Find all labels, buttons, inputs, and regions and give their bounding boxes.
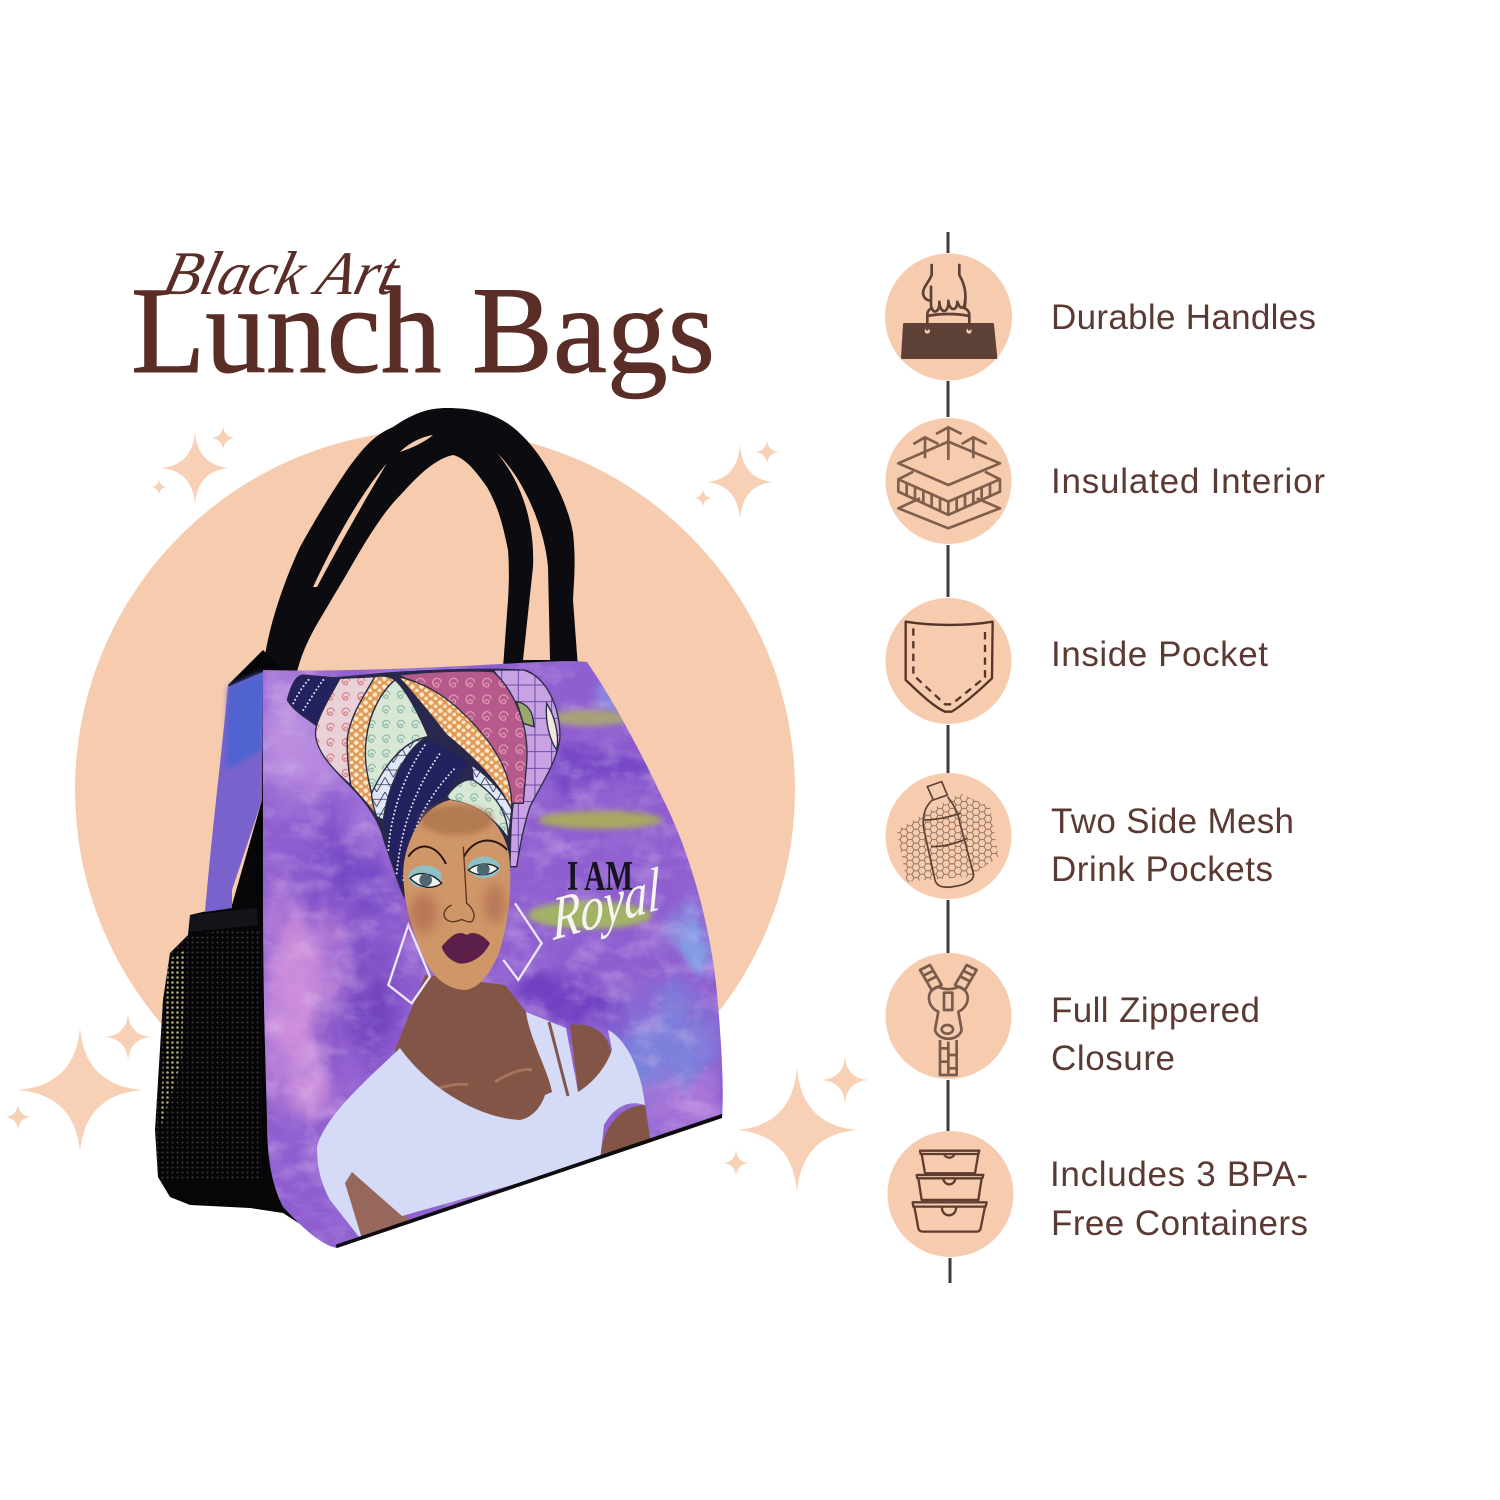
badge <box>885 254 1012 380</box>
label: Insulated Interior <box>1051 462 1325 501</box>
collarbone highlights <box>438 1068 532 1089</box>
chest and arms <box>345 975 655 1250</box>
badge <box>886 773 1012 899</box>
badge <box>888 1131 1014 1257</box>
label: Inside Pocket <box>1051 635 1268 674</box>
icon: insulated layers <box>898 427 1000 528</box>
fabric texture <box>255 655 735 1255</box>
feature 3: inside pocket <box>886 598 1268 724</box>
label: Durable Handles <box>1051 298 1316 337</box>
feature 4: mesh drink pockets <box>886 773 1294 899</box>
icon: zipper <box>920 965 977 1075</box>
icon: bottle in mesh <box>897 782 998 887</box>
sparkles <box>5 426 868 1192</box>
head wrap <box>287 669 560 897</box>
feature 1: durable handles <box>885 254 1316 380</box>
bag handles <box>263 408 578 672</box>
label: Includes 3 BPA- <box>1050 1155 1308 1194</box>
bag side panel <box>155 650 300 1224</box>
lips <box>442 933 490 964</box>
label <box>1050 1155 1308 1243</box>
white top <box>317 1012 645 1242</box>
bag front panel <box>245 655 735 1255</box>
label <box>1051 802 1294 889</box>
right cheek <box>485 883 505 923</box>
badge <box>886 953 1012 1079</box>
bag slogan <box>550 854 661 954</box>
title <box>131 239 715 399</box>
forehead shade <box>420 805 493 835</box>
feature 6: containers <box>888 1131 1308 1257</box>
label: Free Containers <box>1051 1204 1308 1243</box>
title: Lunch Bags: Lunch Bags <box>131 262 715 399</box>
watercolor wash <box>245 660 720 1130</box>
badge <box>886 418 1012 544</box>
label: Two Side Mesh <box>1051 802 1294 841</box>
icon: hand holding bag <box>902 265 996 358</box>
olive stripes <box>528 710 662 929</box>
label: Full Zippered <box>1051 991 1260 1030</box>
badge <box>886 598 1012 724</box>
icon: stacked containers <box>913 1151 987 1232</box>
face <box>403 800 510 990</box>
icon: pocket <box>906 622 993 712</box>
scarf dots <box>293 678 457 880</box>
label: Drink Pockets <box>1051 850 1273 889</box>
label <box>1051 991 1260 1078</box>
feature timeline <box>885 232 1325 1283</box>
lunch bag illustration <box>150 408 735 1255</box>
slogan: I AM: I AM <box>567 854 633 900</box>
title: Black Art script: Black Art <box>157 239 407 308</box>
slogan: Royal: Royal <box>550 855 661 954</box>
portrait: head, scarf and face <box>287 669 560 1003</box>
bottom rim <box>337 1118 724 1249</box>
vertical connector line <box>948 232 950 1283</box>
feature 2: insulated interior <box>886 418 1325 544</box>
cheeks <box>410 893 437 933</box>
label: Closure <box>1051 1039 1175 1078</box>
peach background circle <box>75 430 795 1150</box>
brows <box>408 841 507 864</box>
earrings <box>388 903 542 1003</box>
eyes <box>408 857 500 888</box>
mesh side pocket <box>150 930 265 1180</box>
nose <box>444 847 474 922</box>
feature 5: zippered closure <box>886 953 1260 1079</box>
fabric shadow texture <box>266 661 711 1227</box>
